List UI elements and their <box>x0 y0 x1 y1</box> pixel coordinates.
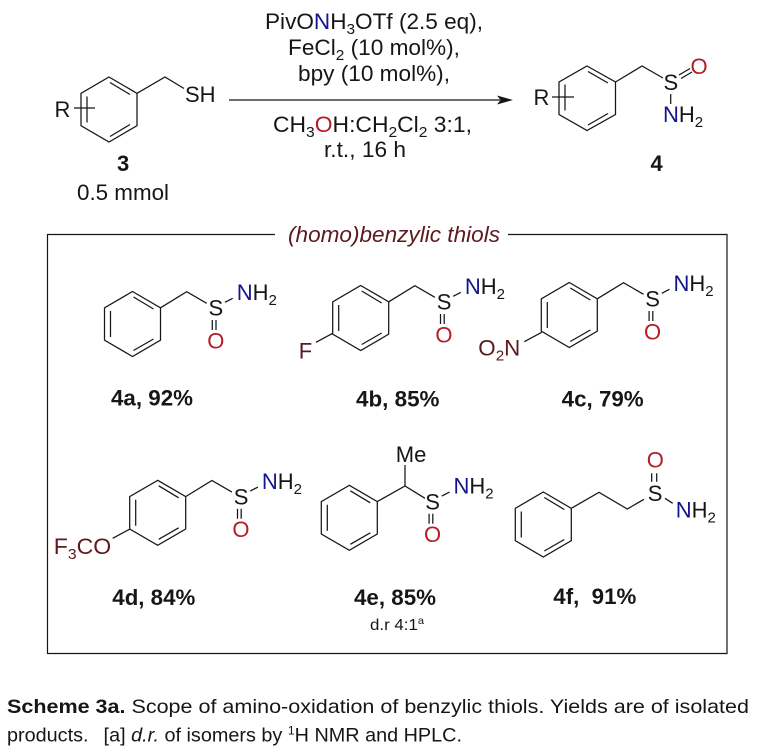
label 4d: 4d, 84% <box>112 585 195 610</box>
compound 4d: F <box>54 534 67 559</box>
compound 4d <box>54 469 302 563</box>
compound 4c: 2 <box>496 348 504 365</box>
label: compound 4: 4 <box>650 151 664 176</box>
product 4 structure: 2 <box>695 114 703 131</box>
conditions below arrow: 2 <box>419 124 427 141</box>
compound 4c: S <box>645 287 660 312</box>
reagents above arrow: (10 mol%), <box>344 35 460 60</box>
compound 4c <box>478 271 714 365</box>
reagents above arrow: 3 <box>347 21 355 38</box>
product 4 structure: S <box>664 70 678 95</box>
compound 4d: S <box>234 484 248 509</box>
compound 4a: S <box>208 296 223 321</box>
compound 4f <box>515 448 716 557</box>
text: 0.5 mmol: 0.5 mmol <box>77 180 169 205</box>
compound 4e: Me <box>396 442 426 467</box>
panel heading: (homo)benzylic thiols <box>288 222 500 247</box>
compound 4a: NH <box>237 280 268 305</box>
compound 4b: S <box>437 290 451 315</box>
note: diastereomeric ratio: d.r 4:1 <box>370 617 415 634</box>
conditions below arrow: CH <box>273 112 305 137</box>
conditions below arrow: 3:1, <box>427 112 472 137</box>
caption: products. [a] d.r. of isomers by <box>7 724 280 746</box>
reagents above arrow <box>265 9 483 86</box>
reagents above arrow: OTf (2.5 eq), <box>355 9 483 34</box>
product 4 structure: O <box>690 54 708 79</box>
reactant 3 structure <box>54 77 216 142</box>
caption: 1 <box>288 724 295 738</box>
conditions below arrow <box>273 112 472 162</box>
conditions below arrow: Cl <box>397 112 419 137</box>
reactant 3 structure: R <box>54 97 70 122</box>
conditions below arrow: 3 <box>306 124 315 141</box>
compound 4c: 2 <box>705 283 714 300</box>
compound 4d: O <box>232 517 250 542</box>
compound 4f: O <box>647 448 664 473</box>
compound 4b: O <box>435 322 453 347</box>
label 4f: 4f, 91% <box>553 584 636 609</box>
reaction arrow <box>229 96 513 104</box>
reagents above arrow: PivONH <box>265 9 346 34</box>
conditions below arrow: r.t., 16 h <box>324 137 406 162</box>
conditions below arrow: H:CH <box>333 112 386 137</box>
compound 4c: N <box>504 336 520 361</box>
caption <box>7 696 749 746</box>
product 4 structure: R <box>534 85 549 110</box>
compound 4e: 2 <box>485 485 494 502</box>
compound 4b: 2 <box>497 286 505 303</box>
compound 4d: CO <box>77 534 111 559</box>
compound 4f: S <box>648 481 662 506</box>
reagents above arrow: bpy (10 mol%), <box>298 61 450 86</box>
compound 4e <box>321 442 494 550</box>
compound 4b <box>299 274 505 363</box>
product 4 structure <box>534 54 708 131</box>
compound 4b: F <box>299 338 312 363</box>
compound 4f: 2 <box>707 509 716 526</box>
compound 4c: O <box>644 319 661 344</box>
note: diastereomeric ratio: a <box>418 615 424 627</box>
compound 4c: NH <box>674 271 705 296</box>
reactant 3 structure: SH <box>185 82 216 107</box>
conditions below arrow: O <box>315 112 333 137</box>
caption: H NMR and HPLC. <box>295 724 462 746</box>
product 4 structure: NH <box>663 102 695 127</box>
reagents above arrow: FeCl <box>288 35 334 60</box>
compound 4f: NH <box>676 497 707 522</box>
label 4b: 4b, 85% <box>356 387 440 412</box>
label 4c: 4c, 79% <box>562 387 644 412</box>
compound 4d: NH <box>262 469 294 494</box>
compound 4e: S <box>425 489 440 514</box>
compound 4c: O <box>478 336 495 361</box>
compound 4b: NH <box>465 274 497 299</box>
label: compound 3: 3 <box>117 151 129 176</box>
compound 4e: O <box>424 522 441 547</box>
label 4a: 4a, 92% <box>111 386 193 411</box>
label 4e: 4e, 85% <box>354 585 436 610</box>
reagents above arrow: 2 <box>336 47 344 64</box>
compound 4a: O <box>207 328 224 353</box>
caption: Scheme 3a. Scope of amino-oxidation of benzylic thiols. Yields are of isolated <box>7 696 749 718</box>
compound 4d: 2 <box>294 481 302 498</box>
compound 4a: 2 <box>268 292 277 309</box>
conditions below arrow: 2 <box>388 124 397 141</box>
compound 4d: 3 <box>68 546 77 563</box>
compound 4e: NH <box>454 473 485 498</box>
compound 4a <box>104 280 277 356</box>
